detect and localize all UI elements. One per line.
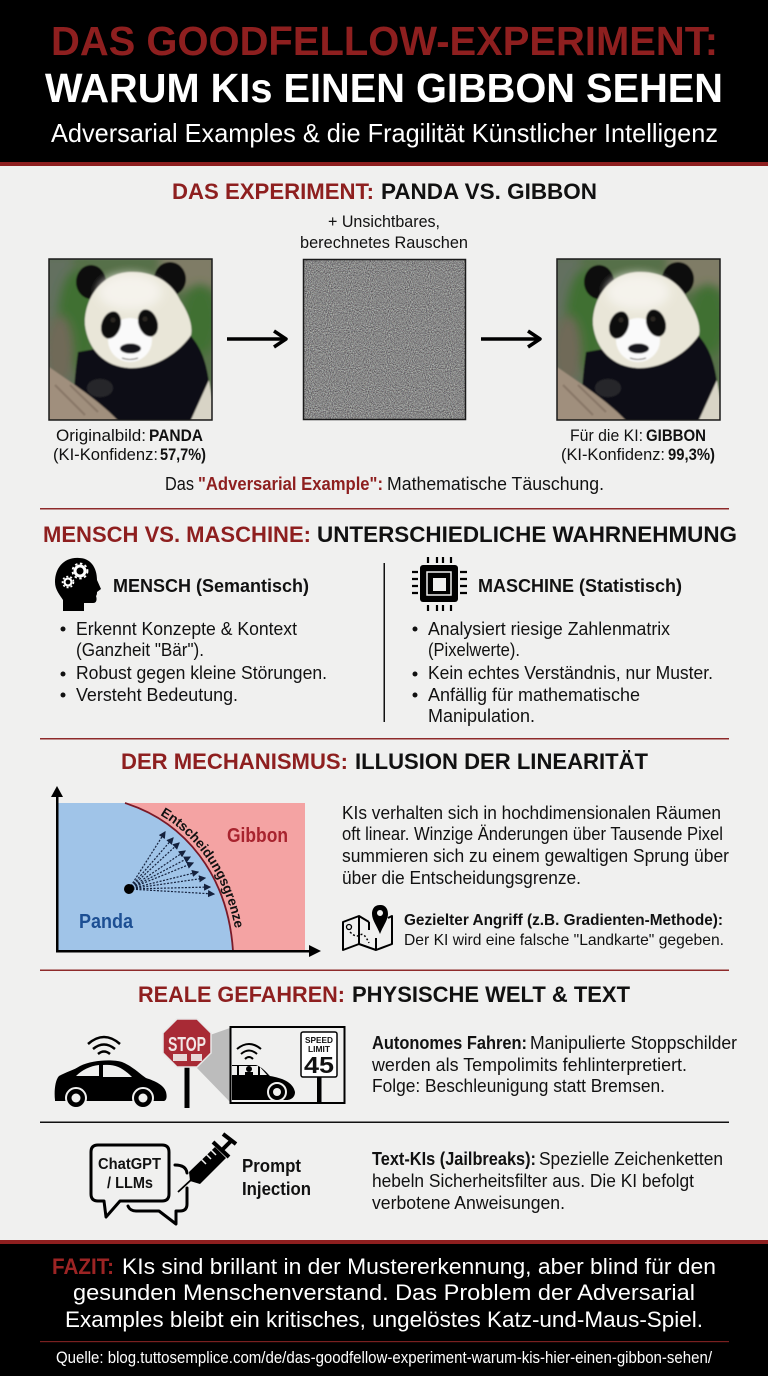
human bullet list: Robust gegen kleine Störungen.: [76, 662, 327, 683]
jailbreak text: hebeln Sicherheitsfilter aus. Die KI befolgt: [372, 1170, 694, 1191]
source: Quelle: blog.tuttosemplice.com/de/das-goodfellow-experiment-warum-kis-hier-einen-gibbon-sehen/: [56, 1349, 712, 1367]
targeted attack note: Der KI wird eine falsche "Landkarte" gegeben.: [404, 932, 724, 949]
mechanism description: KIs verhalten sich in hochdimensionalen Räumen: [342, 802, 721, 823]
caption: original: (KI-Konfidenz:: [53, 446, 158, 464]
machine bullet list: Anfällig für mathematische: [428, 684, 640, 705]
noise label: [300, 213, 468, 252]
machine bullet list: Kein echtes Verständnis, nur Muster.: [428, 662, 713, 683]
jailbreak text: Spezielle Zeichenketten: [539, 1148, 723, 1169]
title line 2: WARUM KIs EINEN GIBBON SEHEN: [45, 65, 723, 111]
machine bullet list: Analysiert riesige Zahlenmatrix: [428, 618, 671, 639]
heading: real dangers: PHYSISCHE WELT & TEXT: [352, 982, 630, 1007]
boundary label: Entscheidungsgrenze: [160, 808, 242, 928]
bubble label: ChatGPT: [98, 1156, 161, 1173]
autonomous driving text: Manipulierte Stoppschilder: [530, 1032, 737, 1053]
caption: original: Originalbild:: [56, 427, 146, 445]
machine bullet list: Manipulation.: [428, 705, 535, 726]
autonomous driving text: Folge: Beschleunigung statt Bremsen.: [372, 1075, 665, 1096]
human bullet list: Versteht Bedeutung.: [76, 684, 238, 705]
icon: zoom beam: [197, 1028, 230, 1102]
adversarial example statement: Das: [165, 473, 194, 494]
adversarial example statement: [165, 473, 604, 494]
heading: real dangers: REALE GEFAHREN:: [138, 982, 345, 1007]
arrow: noise to gibbon: [481, 331, 540, 347]
autonomous driving text: [371, 1032, 737, 1096]
heading: experiment: DAS EXPERIMENT:: [172, 179, 374, 204]
speed sign text: [304, 1035, 334, 1078]
heading: human vs machine: UNTERSCHIEDLICHE WAHRNEHMUNG: [317, 522, 737, 547]
human bullet list: Erkennt Konzepte & Kontext: [76, 618, 297, 639]
human bullet list: [60, 618, 327, 705]
panel: human: [55, 558, 327, 705]
caption: original: 57,7%): [160, 446, 206, 464]
caption: original: PANDA: [149, 427, 203, 445]
caption: adversarial: (KI-Konfidenz:: [561, 446, 665, 464]
icon: chip: [412, 557, 467, 611]
image: noise: [303, 259, 466, 420]
adversarial example statement: Mathematische Täuschung.: [387, 473, 604, 494]
icon: stop sign with stickers: STOP: [168, 1034, 206, 1056]
conclusion: FAZIT:: [52, 1254, 114, 1279]
autonomous driving text: Autonomes Fahren:: [372, 1032, 527, 1053]
prompt injection label: [242, 1155, 311, 1199]
arrow: panda to noise: [227, 331, 286, 347]
prompt injection label: Prompt: [242, 1155, 301, 1176]
human title: MENSCH (Semantisch): [113, 575, 309, 596]
machine title: MASCHINE (Statistisch): [478, 575, 682, 596]
icon: chat bubbles: [91, 1145, 187, 1224]
perturbation arrows: [129, 832, 214, 894]
jailbreak text: verbotene Anweisungen.: [372, 1192, 565, 1213]
caption: adversarial: 99,3%): [668, 446, 715, 464]
mechanism description: summieren sich zu einem gewaltigen Sprung über: [342, 845, 729, 866]
caption: adversarial: [561, 427, 715, 464]
icon: map with pin: [343, 905, 392, 950]
image: adversarial panda: [548, 250, 728, 425]
adversarial example statement: "Adversarial Example":: [198, 473, 383, 494]
heading: mechanism: ILLUSION DER LINEARITÄT: [355, 749, 648, 774]
car in panel: [232, 1044, 295, 1101]
conclusion: Examples bleibt ein kritisches, ungelöstes Katz-und-Maus-Spiel.: [65, 1307, 703, 1332]
caption: original: [53, 427, 206, 464]
autonomous driving text: werden als Tempolimits fehlinterpretiert.: [371, 1054, 687, 1075]
jailbreak text: [372, 1148, 723, 1213]
conclusion: KIs sind brillant in der Mustererkennung, aber blind für den: [122, 1254, 716, 1279]
chart: decision boundary: [51, 786, 321, 957]
heading: mechanism: [121, 749, 648, 774]
heading: real dangers: [138, 982, 630, 1007]
speed sign text: 45: [304, 1052, 334, 1078]
icon: speed limit misread panel: [230, 1027, 344, 1103]
footer banner: [0, 1240, 768, 1376]
jailbreak text: Text-KIs (Jailbreaks):: [372, 1148, 536, 1169]
machine bullet list: [412, 618, 713, 726]
title line 1: DAS GOODFELLOW-EXPERIMENT:: [51, 18, 718, 64]
heading: experiment: PANDA VS. GIBBON: [381, 179, 597, 204]
conclusion: [52, 1254, 716, 1332]
icon: syringe: [178, 1134, 236, 1192]
conclusion: gesunden Menschenverstand. Das Problem der Adversarial: [73, 1280, 695, 1305]
heading: human vs machine: [43, 522, 737, 547]
targeted attack note: [404, 912, 724, 949]
speed sign text: LIMIT: [308, 1044, 331, 1054]
mechanism description: [342, 802, 729, 888]
targeted attack note: Gezielter Angriff (z.B. Gradienten-Methode):: [404, 912, 723, 929]
prompt injection label: Injection: [242, 1178, 311, 1199]
subtitle: Adversarial Examples & die Fragilität Künstlicher Intelligenz: [51, 118, 718, 148]
human bullet list: (Ganzheit "Bär").: [76, 639, 204, 660]
mechanism description: oft linear. Winzige Änderungen über Tausende Pixel: [342, 823, 723, 844]
caption: adversarial: GIBBON: [646, 427, 706, 445]
icon: connected car: [55, 1037, 167, 1108]
region label: panda: Panda: [79, 911, 134, 933]
speed sign text: SPEED: [305, 1035, 333, 1045]
noise label: + Unsichtbares,: [328, 213, 440, 231]
panel: machine: [412, 557, 713, 726]
start point: [124, 884, 134, 894]
axes: [51, 786, 321, 957]
bubble label: [98, 1156, 161, 1192]
heading: experiment: [172, 179, 597, 204]
noise label: berechnetes Rauschen: [300, 234, 468, 252]
image: original panda: [40, 250, 220, 425]
icon: stop sign with stickers: [163, 1019, 211, 1108]
caption: adversarial: Für die KI:: [570, 427, 643, 445]
machine bullet list: (Pixelwerte).: [428, 639, 520, 660]
icon: head with gears: [55, 558, 101, 611]
header banner: [0, 0, 768, 166]
mechanism description: über die Entscheidungsgrenze.: [342, 867, 581, 888]
heading: human vs machine: MENSCH VS. MASCHINE:: [43, 522, 311, 547]
bubble label: / LLMs: [107, 1175, 153, 1192]
region label: gibbon: Gibbon: [227, 825, 288, 847]
heading: mechanism: DER MECHANISMUS:: [121, 749, 348, 774]
